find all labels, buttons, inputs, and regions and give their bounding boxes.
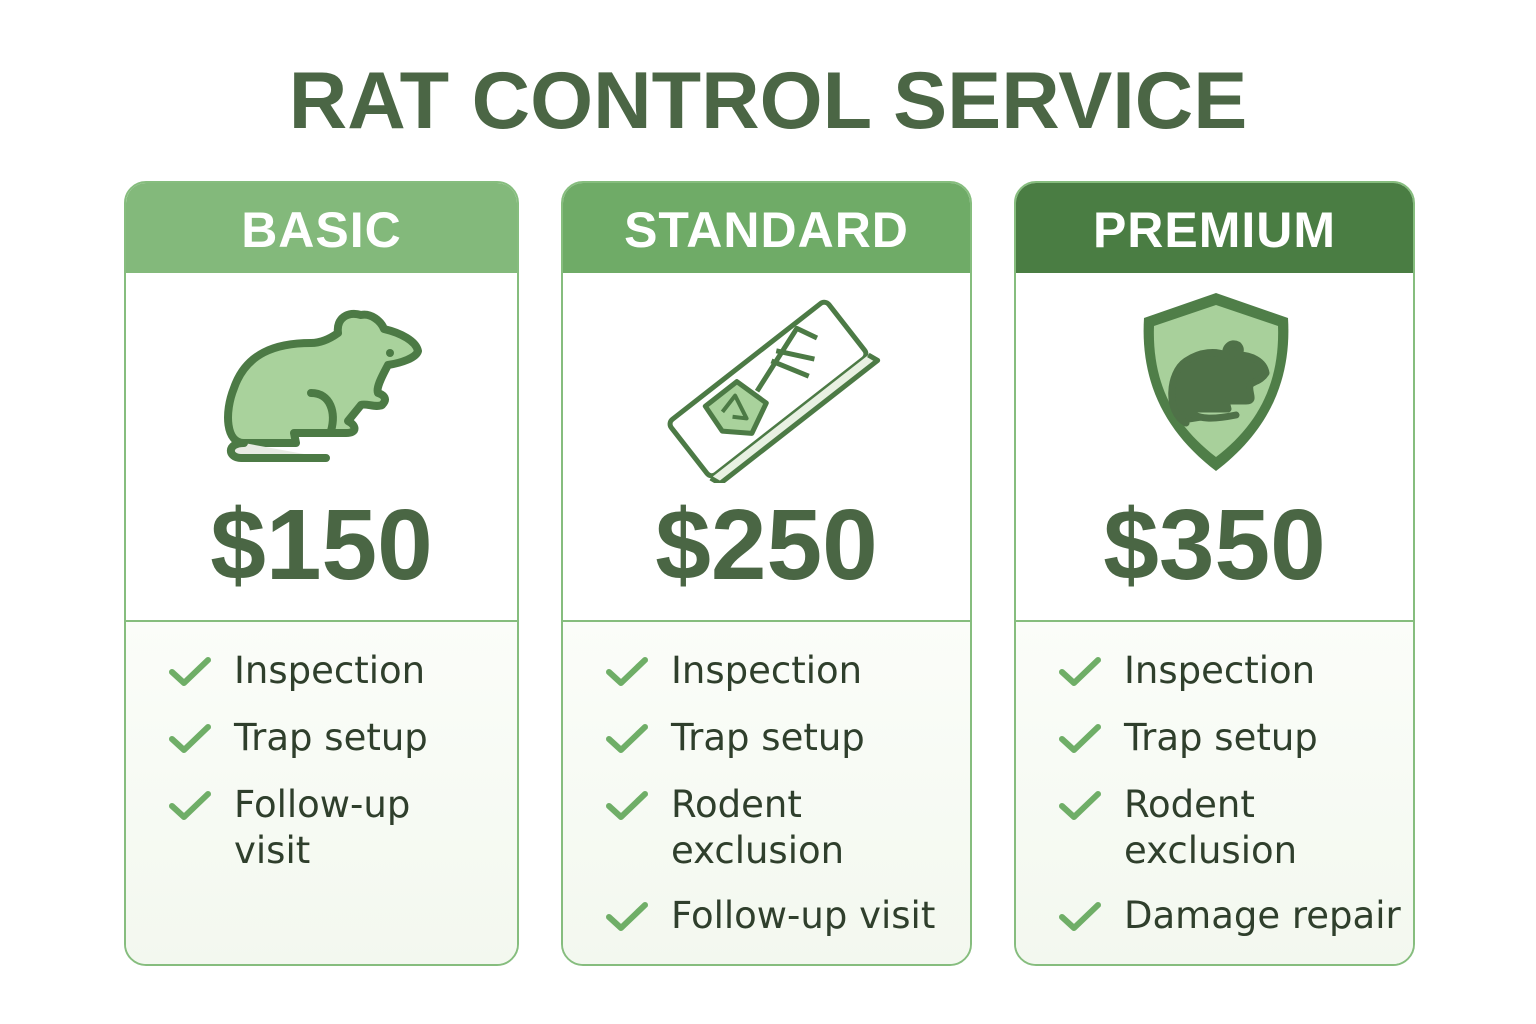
item: trap setup: Trap setup <box>671 716 865 759</box>
item: rodent exclusion <box>606 783 844 872</box>
item: follow-up: visit <box>234 829 310 872</box>
item: trap setup: Trap setup <box>1124 716 1318 759</box>
item: rodent exclusion: Rodent <box>671 783 802 826</box>
panel: premium <box>1014 181 1415 966</box>
header: basic <box>126 183 517 273</box>
item: damage repair: Damage repair <box>1124 894 1401 937</box>
icon: rat <box>224 310 422 462</box>
panel: standard <box>561 181 972 966</box>
item: rodent exclusion: Rodent <box>1124 783 1255 826</box>
item: rodent exclusion <box>1059 783 1297 872</box>
item: inspection: Inspection <box>234 649 425 692</box>
item: rodent exclusion: exclusion <box>671 829 844 872</box>
price: standard: $250 <box>655 489 878 601</box>
header: standard <box>563 183 970 273</box>
panel: basic <box>124 181 519 966</box>
price: basic: $150 <box>210 489 433 601</box>
header: standard: STANDARD <box>624 202 909 258</box>
features: standard <box>563 620 970 964</box>
icon: shield rat <box>1144 293 1288 471</box>
features: premium <box>1016 620 1413 964</box>
features: basic <box>126 620 517 964</box>
item: follow-up visit: Follow-up visit <box>671 894 935 937</box>
item: inspection: Inspection <box>1124 649 1315 692</box>
item: trap setup: Trap setup <box>234 716 428 759</box>
item: rodent exclusion: exclusion <box>1124 829 1297 872</box>
title: RAT CONTROL SERVICE <box>289 56 1247 146</box>
price: premium: $350 <box>1103 489 1326 601</box>
item: inspection: Inspection <box>671 649 862 692</box>
icon: trap <box>668 300 880 483</box>
header: premium: PREMIUM <box>1093 202 1336 258</box>
header: basic: BASIC <box>241 202 402 258</box>
item: follow-up: Follow-up <box>234 783 410 826</box>
header: premium <box>1016 183 1413 273</box>
item: follow-up <box>169 783 410 872</box>
